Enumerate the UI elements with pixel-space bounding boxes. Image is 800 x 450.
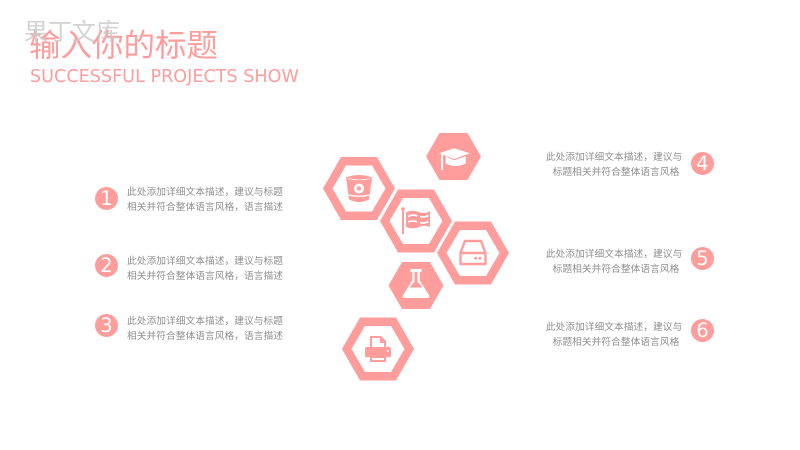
number 4 [691, 152, 714, 175]
hexagon: hard drive [437, 222, 509, 284]
text 1 [127, 186, 283, 213]
text 4 [546, 152, 682, 178]
item 2 [95, 254, 283, 282]
text 2: 相关并符合整体语言风格，语言描述 [127, 271, 283, 282]
number 2 [95, 254, 118, 277]
number 4: 4 [696, 152, 709, 175]
text 5: 此处添加详细文本描述，建议与 [546, 249, 682, 260]
hexagon: flask [388, 262, 444, 309]
text 4: 标题相关并符合整体语言风格 [553, 167, 679, 178]
number 5: 5 [696, 247, 709, 270]
text 3 [127, 316, 283, 342]
item 6 [546, 319, 714, 348]
hexagon: bucket [323, 157, 395, 220]
text 6: 此处添加详细文本描述，建议与 [546, 322, 682, 333]
number 5 [691, 247, 714, 270]
text 4: 此处添加详细文本描述，建议与 [546, 152, 682, 163]
item 1 [95, 186, 283, 213]
number 3 [95, 314, 118, 337]
number 6 [691, 319, 714, 342]
hexagon: graduation cap [426, 133, 481, 180]
text 5 [546, 248, 682, 275]
text 3: 相关并符合整体语言风格，语言描述 [127, 331, 283, 342]
item 3 [95, 314, 283, 342]
text 2 [127, 256, 283, 282]
text 2: 此处添加详细文本描述，建议与标题 [127, 256, 283, 267]
subtitle: SUCCESSFUL PROJECTS SHOW [30, 67, 299, 87]
text 6 [546, 322, 682, 348]
item 4 [546, 152, 714, 178]
text 5: 标题相关并符合整体语言风格 [553, 264, 679, 275]
number 1: 1 [100, 187, 113, 210]
number 3: 3 [100, 314, 113, 337]
number 2: 2 [100, 254, 113, 277]
text 1: 相关并符合整体语言风格，语言描述 [127, 202, 283, 213]
number 1 [95, 187, 118, 210]
text 6: 标题相关并符合整体语言风格 [553, 337, 679, 348]
hexagon: printer [342, 318, 414, 380]
text 1: 此处添加详细文本描述，建议与标题 [127, 187, 283, 198]
title: 输入你的标题 [29, 28, 218, 64]
item 5 [546, 247, 714, 275]
hexagon: flag [380, 190, 452, 252]
number 6: 6 [696, 319, 709, 342]
watermark: 果丁文库 [24, 18, 120, 46]
text 3: 此处添加详细文本描述，建议与标题 [127, 316, 283, 327]
